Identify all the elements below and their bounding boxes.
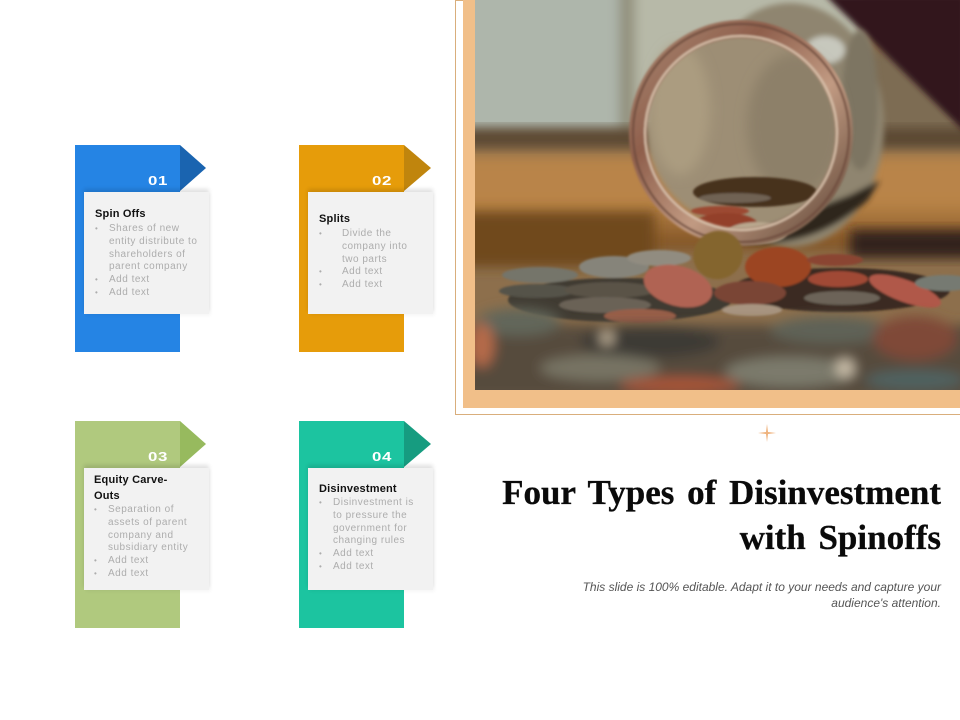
bullet list: assets of parent — [108, 517, 187, 528]
bullet list — [319, 228, 407, 290]
bullet list: Add text — [108, 568, 149, 579]
bullet list — [95, 223, 197, 298]
wall — [455, 0, 960, 145]
heading: equity carve-outs — [94, 474, 168, 502]
shadow line at wall base — [455, 128, 960, 148]
bullet list: Add text — [333, 548, 374, 559]
heading: equity carve-outs: Outs — [94, 490, 120, 502]
panel: equity carve-outs — [75, 421, 211, 628]
title: with Spinoffs — [740, 518, 941, 557]
text card — [308, 192, 433, 314]
heading: spin offs: Spin Offs — [95, 208, 146, 220]
panel: splits — [299, 145, 435, 352]
title — [502, 473, 942, 557]
bullet list: Add text — [109, 274, 150, 285]
blurred foreground coins — [455, 308, 960, 400]
green ribbon — [75, 421, 180, 628]
number 02: 02 — [372, 173, 392, 188]
icon: four-point star — [758, 424, 776, 442]
bullet list: Add text — [109, 287, 150, 298]
orange arrow tip — [404, 145, 431, 191]
blue ribbon — [75, 145, 180, 352]
bullet list: Add text — [342, 279, 383, 290]
bullet list: changing rules — [333, 535, 405, 546]
subtitle: audience's attention. — [831, 596, 941, 610]
green arrow tip — [180, 421, 206, 467]
number 04: 04 — [372, 449, 392, 464]
photo tan backing — [463, 0, 960, 408]
bullet list: Add text — [342, 266, 383, 277]
orange ribbon — [299, 145, 404, 352]
table — [455, 155, 960, 250]
jar mouth inner — [647, 32, 843, 228]
bullet list — [94, 504, 188, 579]
bullet list: Add text — [108, 555, 149, 566]
title: Four Types of Disinvestment — [502, 473, 941, 512]
bullet list: Add text — [333, 561, 374, 572]
bullet list: company into — [342, 241, 407, 252]
coins in jar — [691, 177, 817, 244]
jar body — [696, 3, 884, 247]
subtitle — [583, 580, 942, 610]
bullet list: shareholders of — [109, 249, 185, 260]
heading: equity carve-outs: Equity Carve- — [94, 474, 168, 486]
heading: disinvestment: Disinvestment — [319, 483, 397, 495]
focused coins — [499, 223, 960, 323]
bullet list: government for — [333, 523, 407, 534]
text card — [84, 468, 209, 590]
bullet list: Divide the — [342, 228, 391, 239]
panel: spin offs — [75, 145, 211, 352]
bullet list: two parts — [342, 254, 387, 265]
bullet list: subsidiary entity — [108, 542, 188, 553]
bullet list: to pressure the — [333, 510, 407, 521]
bullet list: Disinvestment is — [333, 497, 414, 508]
bullet list: company and — [108, 530, 174, 541]
photo: coins spilling from glass jar — [475, 0, 960, 390]
bullet list: Separation of — [108, 504, 174, 515]
teal ribbon — [299, 421, 404, 628]
number 03: 03 — [148, 449, 168, 464]
panel: disinvestment — [299, 421, 435, 628]
bullet list: parent company — [109, 261, 188, 272]
bullet list: entity distribute to — [109, 236, 197, 247]
bullet list — [319, 497, 414, 572]
jar rim — [633, 24, 849, 242]
subtitle: This slide is 100% editable. Adapt it to your needs and capture your — [583, 580, 941, 594]
text card — [84, 192, 209, 314]
blue arrow tip — [180, 145, 206, 191]
teal arrow tip — [404, 421, 431, 467]
bullet list: Shares of new — [109, 223, 179, 234]
text card — [308, 468, 433, 590]
photo frame outline — [455, 0, 960, 415]
number 01: 01 — [148, 173, 168, 188]
dark red object — [825, 0, 960, 132]
heading: splits: Splits — [319, 213, 350, 225]
